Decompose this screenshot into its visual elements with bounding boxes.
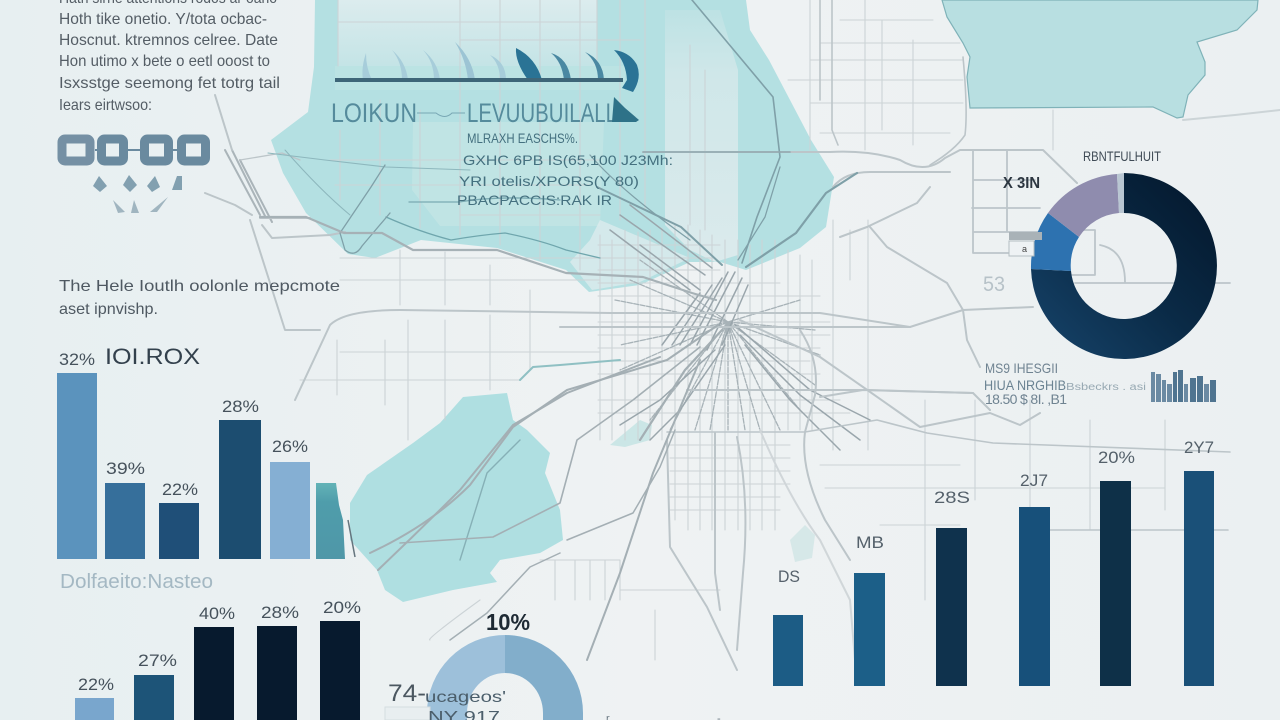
bar chart: lower right: DS [778, 567, 800, 586]
donut chart: bottom centre: ucageos' [425, 689, 506, 706]
bar chart: upper left: IOI.ROX [105, 344, 200, 369]
map label box [1009, 232, 1042, 256]
text block: chart intro [59, 278, 340, 318]
intro text block [59, 0, 280, 114]
section heading: map title waves [335, 42, 639, 92]
major roads [205, 0, 1280, 670]
map annotation text: MLRAXH EASCHS%. [467, 130, 578, 146]
water: top-right lake [942, 0, 1258, 118]
bar chart: lower left: 22% [78, 675, 114, 694]
donut chart: bottom centre: 74- [388, 680, 426, 707]
legend text lower right: MS9 IHESGII [985, 360, 1058, 376]
bar chart: lower left: 40% [199, 604, 235, 623]
map annotation text: YRI otelis/XPORS(Y 80) [459, 173, 639, 189]
icon row: square tiles [62, 139, 206, 161]
bar chart: lower right [773, 438, 1214, 686]
bar chart: upper left: 26% [272, 437, 308, 456]
section heading: map subtitle: LOIKUN [331, 98, 417, 128]
bar chart: lower right: 28S [934, 488, 970, 507]
intro text block: Hoscnut. ktremnos celree. Date [59, 32, 278, 49]
bar chart: lower left [75, 598, 361, 720]
donut chart: upper right: RBNTFULHUIT [1083, 148, 1161, 164]
map annotation text: PBACPACCIS:RAK IR [457, 192, 612, 208]
intro text block: Hon utimo x bete o eetl ooost to [59, 53, 270, 70]
bar chart: upper left: 32% [59, 350, 95, 369]
icon row: small markers [93, 175, 182, 213]
water: upper lake [271, 0, 834, 292]
intro text block: Hoth tike onetio. Y/tota ocbac- [59, 11, 267, 28]
bar chart: lower left: 20% [323, 598, 361, 617]
bar chart: lower right: 2Y7 [1184, 438, 1214, 457]
donut chart: upper right [1031, 148, 1217, 359]
bar chart: upper left: 39% [106, 459, 145, 478]
donut chart: bottom centre [385, 609, 583, 720]
map annotation text [457, 130, 673, 208]
intro text block: Isxsstge seemong fet totrg tail [59, 75, 280, 92]
water: lower-left lake [350, 393, 815, 602]
map annotation text: GXHC 6PB IS(65,100 J23Mh: [463, 152, 673, 168]
main west road [260, 217, 716, 300]
legend text lower right: HIUA NRGHIB [984, 377, 1066, 393]
mini bar chart [1151, 370, 1216, 402]
map label: top right: X 3IN [1003, 175, 1040, 192]
legend text lower right: Bsbeckrs . asi [1066, 382, 1146, 393]
bar chart: lower left: 28% [261, 603, 299, 622]
bar chart: upper left [57, 344, 355, 559]
section heading: map subtitle: LEVUUBUILALL [467, 98, 617, 128]
bar chart: lower right: 20% [1098, 448, 1135, 467]
legend text lower right [984, 360, 1146, 407]
roads over the upper lake [268, 0, 857, 267]
map label: number: 53 [983, 273, 1005, 296]
roads towards lower-left [370, 325, 722, 660]
text block: chart intro: aset ipnvishp. [59, 301, 158, 318]
bar chart: lower right: 2J7 [1020, 471, 1048, 490]
legend text lower right: 18.50 $ 8I. ,B1 [985, 391, 1067, 407]
bar chart: upper left: 28% [222, 397, 259, 416]
bar chart: lower left: 27% [138, 651, 177, 670]
dense radial streets [615, 260, 820, 430]
bar chart: upper left: 22% [162, 480, 198, 499]
section heading: map subtitle [331, 97, 639, 128]
road network map [205, 0, 1280, 670]
bar chart: lower right: MB [856, 533, 884, 552]
street grid [300, 0, 1165, 660]
text block: chart intro: The Hele Ioutlh oolonle mepcmote [59, 278, 340, 295]
chart heading: lower left: Dolfaeito:Nasteo [60, 571, 213, 593]
top-right block roads [972, 150, 1230, 283]
map label box: a [1022, 244, 1027, 254]
donut chart: bottom centre: 10% [486, 609, 530, 635]
intro text block: Iears eirtwsoo: [59, 97, 152, 114]
